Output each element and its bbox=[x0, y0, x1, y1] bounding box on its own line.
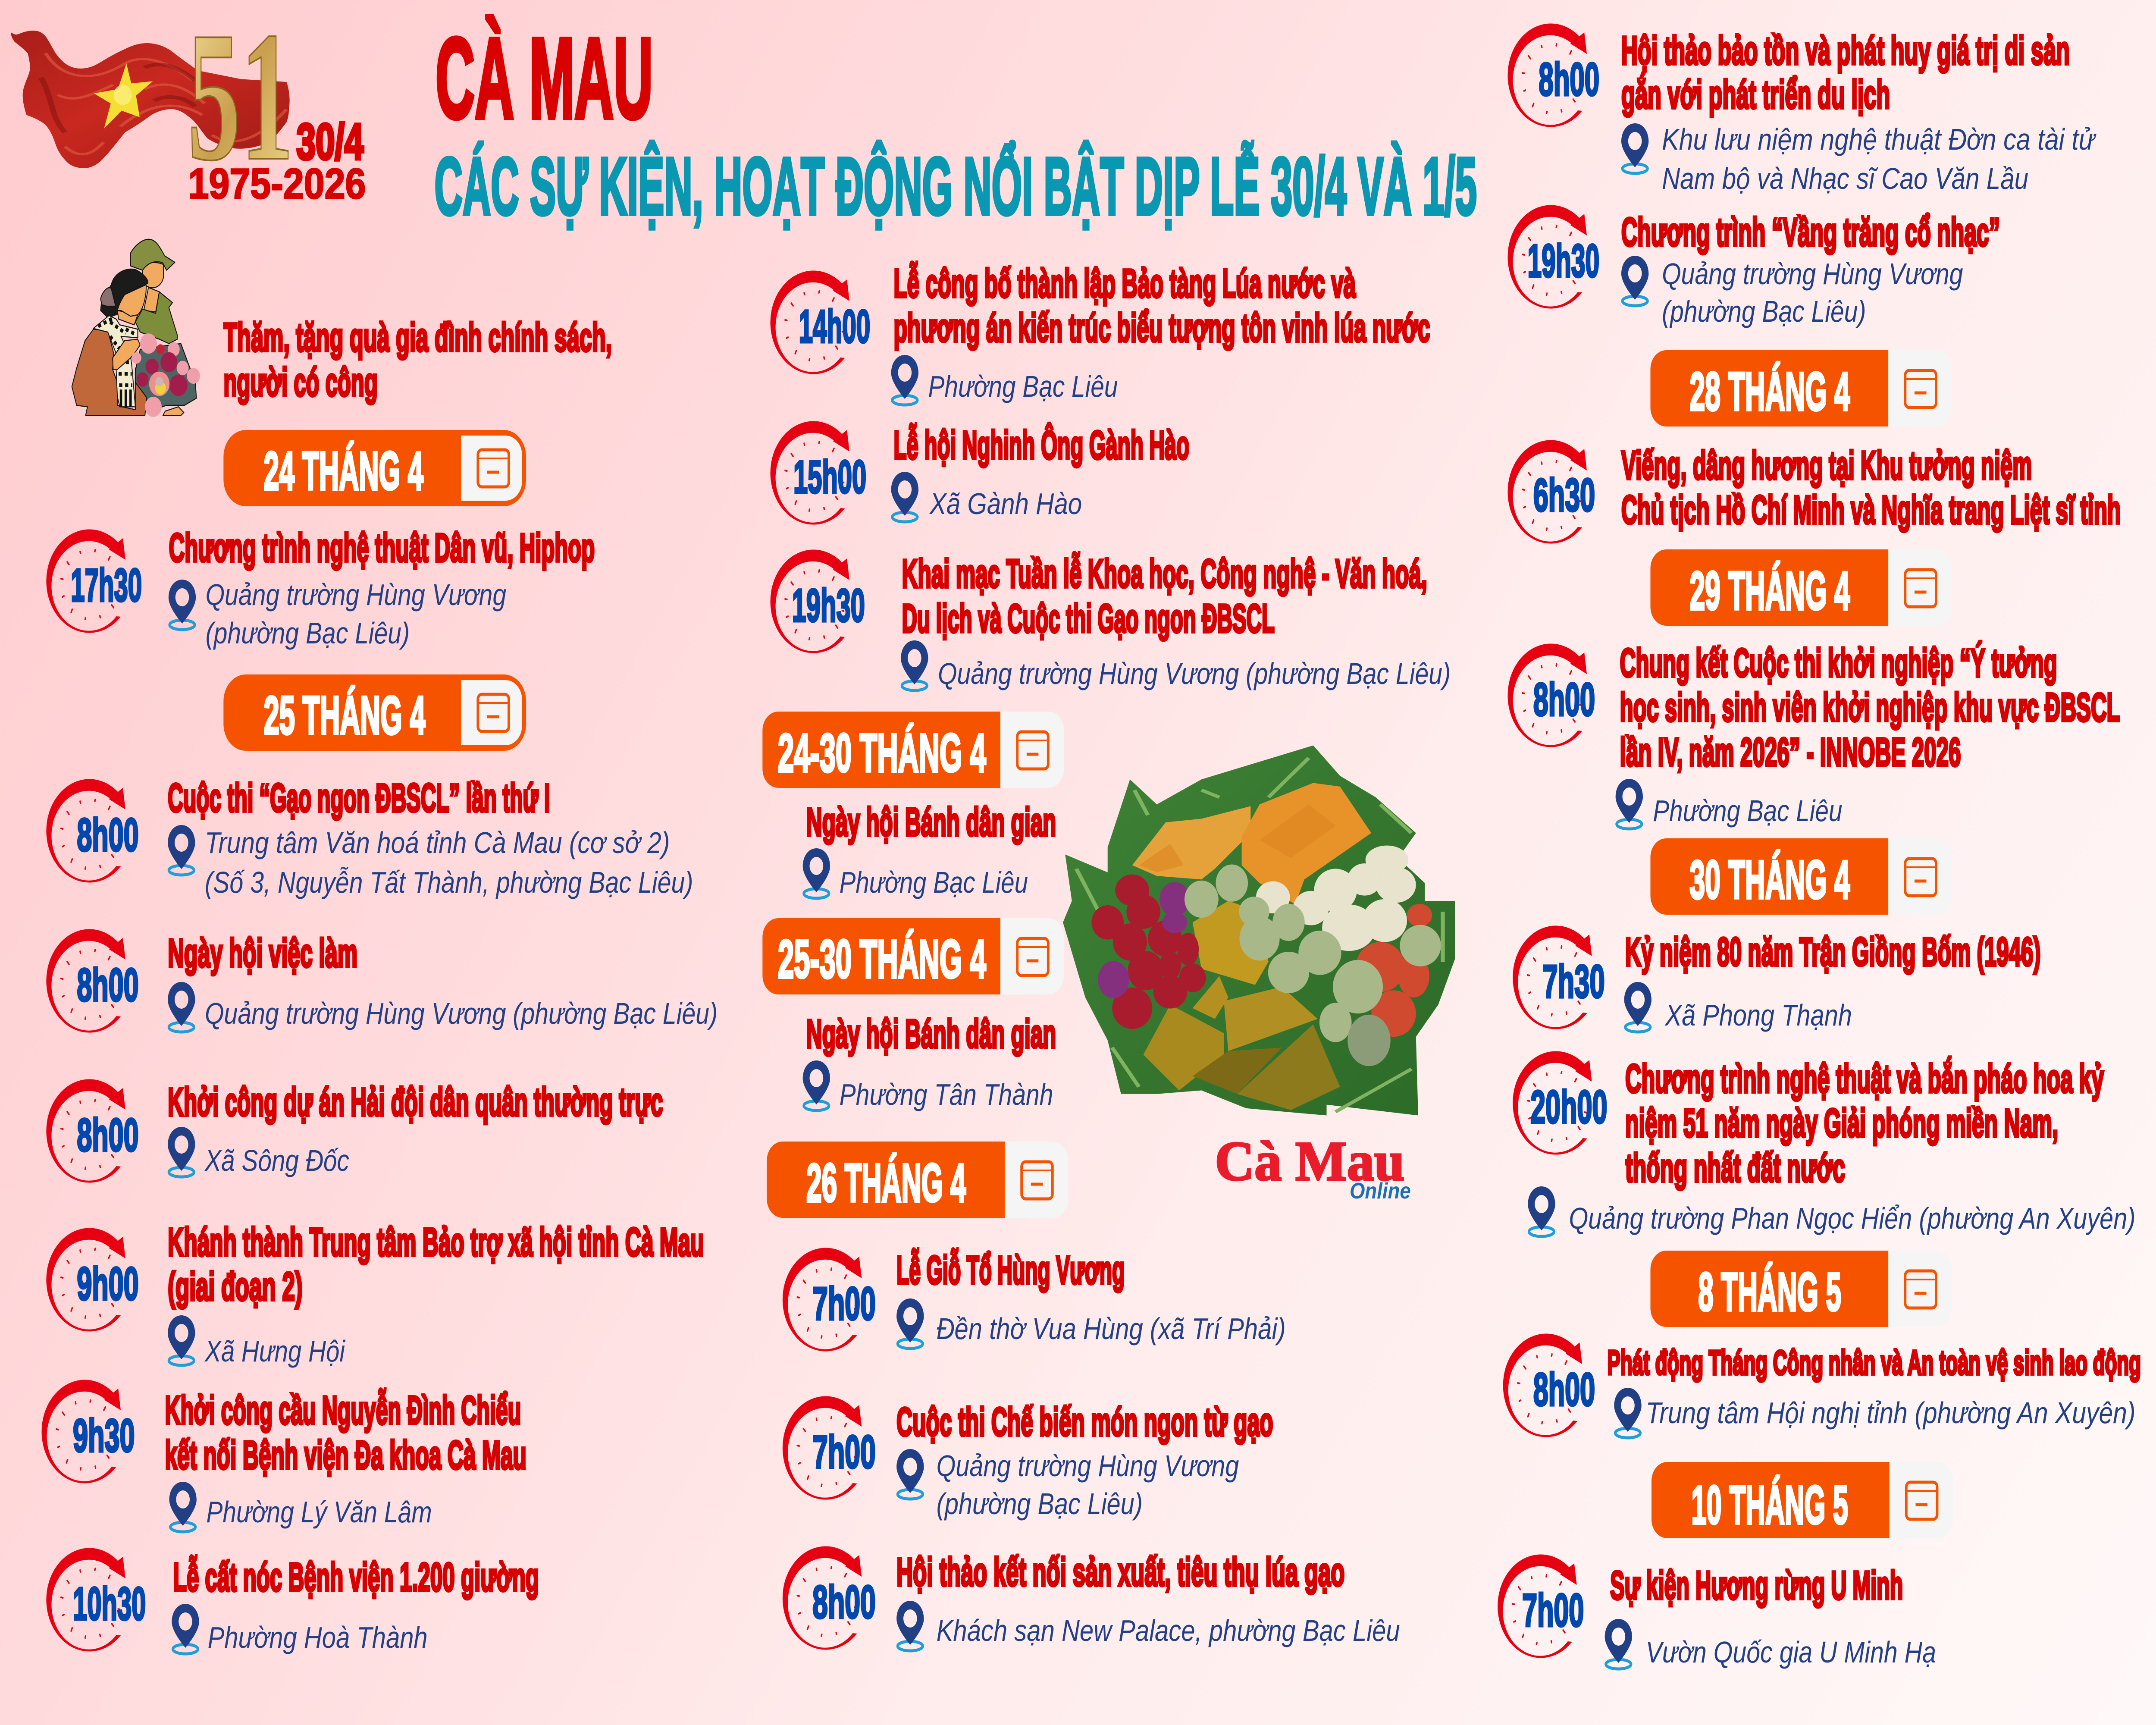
event: Hội thảo lúa gạo bbox=[783, 1546, 1400, 1651]
badge: 25-30 tháng 4: 25-30 THÁNG 4 bbox=[778, 929, 986, 989]
event: Trung tâm Bảo trợ xã hội: (giai đoạn 2) bbox=[168, 1264, 303, 1309]
event: Hội thảo lúa gạo: Hội thảo kết nối sản xuất, tiêu thụ lúa gạo bbox=[896, 1550, 1344, 1595]
event: Lễ Giỗ Tổ Hùng Vương: 7h00 bbox=[812, 1278, 876, 1330]
event: Nghinh Ông Gành Hào: Xã Gành Hào bbox=[929, 487, 1082, 521]
logo: Cà Mau Online: Cà Mau bbox=[1215, 1130, 1405, 1192]
event: Viếng, dâng hương: 6h30 bbox=[1533, 469, 1595, 521]
icon: waving red flag with star bbox=[11, 31, 290, 168]
event: Bắn pháo hoa: Quảng trường Phan Ngọc Hiển (phường An Xuyên) bbox=[1569, 1201, 2135, 1235]
event: Tháng Công nhân bbox=[1503, 1334, 2141, 1438]
text: visit families: Thăm, tặng quà gia đình chính sách, bbox=[223, 315, 612, 360]
event: Ngày hội Bánh dân gian, Tân Thành: Ngày hội Bánh dân gian bbox=[806, 1012, 1056, 1057]
text: visit families: người có công bbox=[223, 360, 378, 405]
title: CÀ MAU bbox=[436, 14, 653, 142]
event: Viếng, dâng hương bbox=[1508, 440, 2121, 544]
event: Ngày hội việc làm bbox=[46, 929, 718, 1033]
event: Tháng Công nhân: Trung tâm Hội nghị tỉnh (phường An Xuyên) bbox=[1646, 1396, 2135, 1430]
icon: clock bbox=[46, 530, 125, 633]
event: cầu Nguyễn Đình Chiểu: 9h30 bbox=[73, 1410, 135, 1462]
event: Hội thảo di sản: gắn với phát triển du lịch bbox=[1621, 72, 1890, 117]
event: Bệnh viện 1.200 giường bbox=[46, 1548, 539, 1654]
event: Ngày hội Bánh dân gian, Tân Thành bbox=[803, 1012, 1056, 1111]
event: Bảo tàng Lúa nước bbox=[771, 261, 1430, 405]
event: Nghinh Ông Gành Hào bbox=[771, 421, 1189, 525]
icon: pin bbox=[169, 580, 196, 630]
badge: 28 tháng 4 bbox=[1651, 350, 1952, 427]
event: Bắn pháo hoa: 20h00 bbox=[1530, 1081, 1607, 1133]
event: Tuần lễ Khoa học: 19h30 bbox=[792, 580, 865, 632]
event: Hải đội dân quân bbox=[46, 1079, 663, 1183]
event: Tháng Công nhân: 8h00 bbox=[1533, 1364, 1595, 1416]
event: Vầng trăng cổ nhạc: Quảng trường Hùng Vương bbox=[1662, 257, 1963, 291]
event: Cuộc thi Gạo ngon: Cuộc thi “Gạo ngon ĐBSCL” lần thứ I bbox=[168, 776, 550, 821]
logo: 51 years flag emblem bbox=[11, 0, 366, 208]
event: Hội thảo di sản bbox=[1508, 24, 2096, 195]
date 30/4: 30/4 bbox=[297, 114, 364, 170]
event: Trung tâm Bảo trợ xã hội: Xã Hưng Hội bbox=[204, 1334, 345, 1368]
event: Trung tâm Bảo trợ xã hội: Khánh thành Trung tâm Bảo trợ xã hội tỉnh Cà Mau bbox=[168, 1220, 704, 1265]
event: Cuộc thi Gạo ngon: (Số 3, Nguyễn Tất Thành, phường Bạc Liêu) bbox=[205, 866, 693, 899]
event: Bảo tàng Lúa nước: Phường Bạc Liêu bbox=[928, 370, 1118, 403]
event: Nghinh Ông Gành Hào: 15h00 bbox=[793, 451, 866, 503]
event: Hương rừng U Minh: Vườn Quốc gia U Minh Hạ bbox=[1646, 1635, 1936, 1669]
photo: tray of folk cakes bbox=[1063, 745, 1455, 1116]
event: Chung kết khởi nghiệp: lần IV, năm 2026” - INNOBE 2026 bbox=[1620, 730, 1961, 775]
event: Lễ Giỗ Tổ Hùng Vương: Lễ Giỗ Tổ Hùng Vương bbox=[896, 1248, 1125, 1293]
badge: 24 tháng 4 bbox=[223, 430, 526, 506]
event: Ngày hội việc làm: Quảng trường Hùng Vương (phường Bạc Liêu) bbox=[205, 997, 718, 1030]
illustration: soldier and woman with flowers bbox=[72, 239, 200, 417]
badge: 25 tháng 4: 25 THÁNG 4 bbox=[264, 686, 426, 746]
badge: 29 tháng 4 bbox=[1651, 549, 1952, 626]
event: Tuần lễ Khoa học: Khai mạc Tuần lễ Khoa học, Công nghệ - Văn hoá, bbox=[902, 552, 1427, 596]
event: Trận Giồng Bốm: Xã Phong Thạnh bbox=[1664, 998, 1852, 1032]
badge: 24-30 tháng 4: 24-30 THÁNG 4 bbox=[778, 723, 986, 783]
event: Cuộc thi Gạo ngon: Trung tâm Văn hoá tỉnh Cà Mau (cơ sở 2) bbox=[205, 826, 670, 859]
event: Chế biến món ngon từ gạo: Cuộc thi Chế biến món ngon từ gạo bbox=[896, 1400, 1273, 1445]
event: Ngày hội Bánh dân gian, Bạc Liêu: Ngày hội Bánh dân gian bbox=[806, 800, 1056, 845]
event: Ngày hội Bánh dân gian, Bạc Liêu bbox=[803, 800, 1056, 899]
event: Bắn pháo hoa: thống nhất đất nước bbox=[1625, 1146, 1845, 1191]
badge: 30 tháng 4: 30 THÁNG 4 bbox=[1689, 850, 1850, 910]
badge: 25-30 tháng 4 bbox=[762, 918, 1064, 994]
event: Bệnh viện 1.200 giường: Lễ cất nóc Bệnh viện 1.200 giường bbox=[173, 1555, 539, 1600]
badge: 24 tháng 4: 24 THÁNG 4 bbox=[264, 441, 423, 501]
badge: 24-30 tháng 4 bbox=[762, 712, 1064, 788]
event: Hội thảo di sản: Nam bộ và Nhạc sĩ Cao Văn Lầu bbox=[1662, 162, 2028, 195]
badge: 10 tháng 5: 10 THÁNG 5 bbox=[1691, 1475, 1848, 1535]
event: Chung kết khởi nghiệp: 8h00 bbox=[1533, 674, 1595, 726]
event: Bảo tàng Lúa nước: phương án kiến trúc biểu tượng tôn vinh lúa nước bbox=[894, 306, 1430, 351]
event: Vầng trăng cổ nhạc: 19h30 bbox=[1527, 235, 1599, 287]
text: visit families bbox=[223, 315, 612, 405]
event: Hội thảo di sản: 8h00 bbox=[1539, 53, 1599, 106]
event: Nghinh Ông Gành Hào: Lễ hội Nghinh Ông Gành Hào bbox=[894, 423, 1189, 468]
event: cầu Nguyễn Đình Chiểu bbox=[42, 1380, 526, 1532]
event: 17h30: Chương trình nghệ thuật Dân vũ, Hiphop bbox=[169, 526, 595, 571]
badge: 30 tháng 4 bbox=[1651, 838, 1952, 915]
event: Bảo tàng Lúa nước: 14h00 bbox=[799, 301, 870, 353]
event: cầu Nguyễn Đình Chiểu: Phường Lý Văn Lâm bbox=[206, 1495, 432, 1529]
event: Ngày hội việc làm: 8h00 bbox=[77, 959, 139, 1011]
event: Chế biến món ngon từ gạo: 7h00 bbox=[812, 1426, 876, 1478]
badge: 28 tháng 4: 28 THÁNG 4 bbox=[1689, 362, 1850, 422]
event: Trận Giồng Bốm: 7h30 bbox=[1543, 956, 1605, 1008]
event: Vầng trăng cổ nhạc bbox=[1508, 205, 2000, 328]
event: Cuộc thi Gạo ngon: 8h00 bbox=[77, 809, 139, 861]
event: Chế biến món ngon từ gạo bbox=[783, 1396, 1273, 1521]
event: 17h30: Quảng trường Hùng Vương bbox=[206, 578, 506, 612]
event: Ngày hội Bánh dân gian, Tân Thành: Phường Tân Thành bbox=[840, 1078, 1053, 1111]
event: Bảo tàng Lúa nước: Lễ công bố thành lập Bảo tàng Lúa nước và bbox=[894, 261, 1356, 306]
event: Lễ Giỗ Tổ Hùng Vương bbox=[783, 1248, 1286, 1352]
badge: 26 tháng 4 bbox=[767, 1142, 1069, 1218]
event: 17h30: (phường Bạc Liêu) bbox=[206, 616, 410, 650]
event: Chung kết khởi nghiệp bbox=[1508, 641, 2120, 829]
event: Tuần lễ Khoa học bbox=[771, 550, 1451, 690]
event: Trung tâm Bảo trợ xã hội: 9h00 bbox=[77, 1258, 139, 1310]
badge: 25 tháng 4 bbox=[223, 674, 526, 751]
event: cầu Nguyễn Đình Chiểu: kết nối Bệnh viện Đa khoa Cà Mau bbox=[165, 1433, 526, 1478]
badge: 8 tháng 5 bbox=[1651, 1251, 1952, 1327]
years 1975-2026: 1975-2026 bbox=[188, 160, 366, 208]
event: Ngày hội việc làm: Ngày hội việc làm bbox=[168, 931, 357, 976]
event: cầu Nguyễn Đình Chiểu: Khởi công cầu Nguyễn Đình Chiểu bbox=[165, 1388, 521, 1433]
badge: 29 tháng 4: 29 THÁNG 4 bbox=[1689, 561, 1850, 621]
event: Hội thảo di sản: Khu lưu niệm nghệ thuật Đờn ca tài tử bbox=[1662, 122, 2096, 156]
event: Bệnh viện 1.200 giường: Phường Hoà Thành bbox=[208, 1621, 428, 1654]
logo: Cà Mau Online bbox=[1215, 1130, 1411, 1204]
event: Hương rừng U Minh: Sự kiện Hương rừng U Minh bbox=[1610, 1563, 1903, 1608]
event: Cuộc thi Gạo ngon bbox=[46, 776, 693, 899]
event: Vầng trăng cổ nhạc: (phường Bạc Liêu) bbox=[1662, 295, 1866, 328]
event: Hải đội dân quân: 8h00 bbox=[77, 1109, 139, 1161]
event: Hương rừng U Minh bbox=[1498, 1555, 1936, 1669]
event: Hải đội dân quân: Khởi công dự án Hải đội dân quân thường trực bbox=[168, 1080, 663, 1125]
event: Chung kết khởi nghiệp: Phường Bạc Liêu bbox=[1653, 794, 1843, 828]
event: Trận Giồng Bốm bbox=[1513, 926, 2040, 1032]
event: Ngày hội Bánh dân gian, Bạc Liêu: Phường Bạc Liêu bbox=[840, 866, 1028, 899]
event: Trung tâm Bảo trợ xã hội bbox=[46, 1220, 704, 1368]
event: Bệnh viện 1.200 giường: 10h30 bbox=[73, 1578, 146, 1630]
badge: 10 tháng 5 bbox=[1651, 1462, 1953, 1538]
logo: Cà Mau Online: Online bbox=[1350, 1179, 1411, 1204]
event: Tuần lễ Khoa học: Quảng trường Hùng Vương (phường Bạc Liêu) bbox=[938, 657, 1451, 690]
event: Hội thảo lúa gạo: 8h00 bbox=[812, 1576, 876, 1628]
event: Hương rừng U Minh: 7h00 bbox=[1522, 1584, 1584, 1637]
event: Chế biến món ngon từ gạo: Quảng trường Hùng Vương bbox=[937, 1449, 1239, 1483]
event: Chế biến món ngon từ gạo: (phường Bạc Liêu) bbox=[937, 1487, 1143, 1521]
event: Hội thảo lúa gạo: Khách sạn New Palace, phường Bạc Liêu bbox=[937, 1614, 1400, 1647]
event: Bắn pháo hoa bbox=[1513, 1051, 2135, 1236]
event: Tuần lễ Khoa học: Du lịch và Cuộc thi Gạo ngon ĐBSCL bbox=[902, 596, 1275, 641]
event: Hải đội dân quân: Xã Sông Đốc bbox=[204, 1144, 349, 1177]
event: 17h30 bbox=[46, 526, 595, 650]
badge: 8 tháng 5: 8 THÁNG 5 bbox=[1698, 1262, 1841, 1322]
event: Lễ Giỗ Tổ Hùng Vương: Đền thờ Vua Hùng (xã Trí Phải) bbox=[937, 1312, 1286, 1346]
event: 17h30: 17h30 bbox=[71, 559, 142, 612]
badge: 26 tháng 4: 26 THÁNG 4 bbox=[806, 1153, 966, 1213]
